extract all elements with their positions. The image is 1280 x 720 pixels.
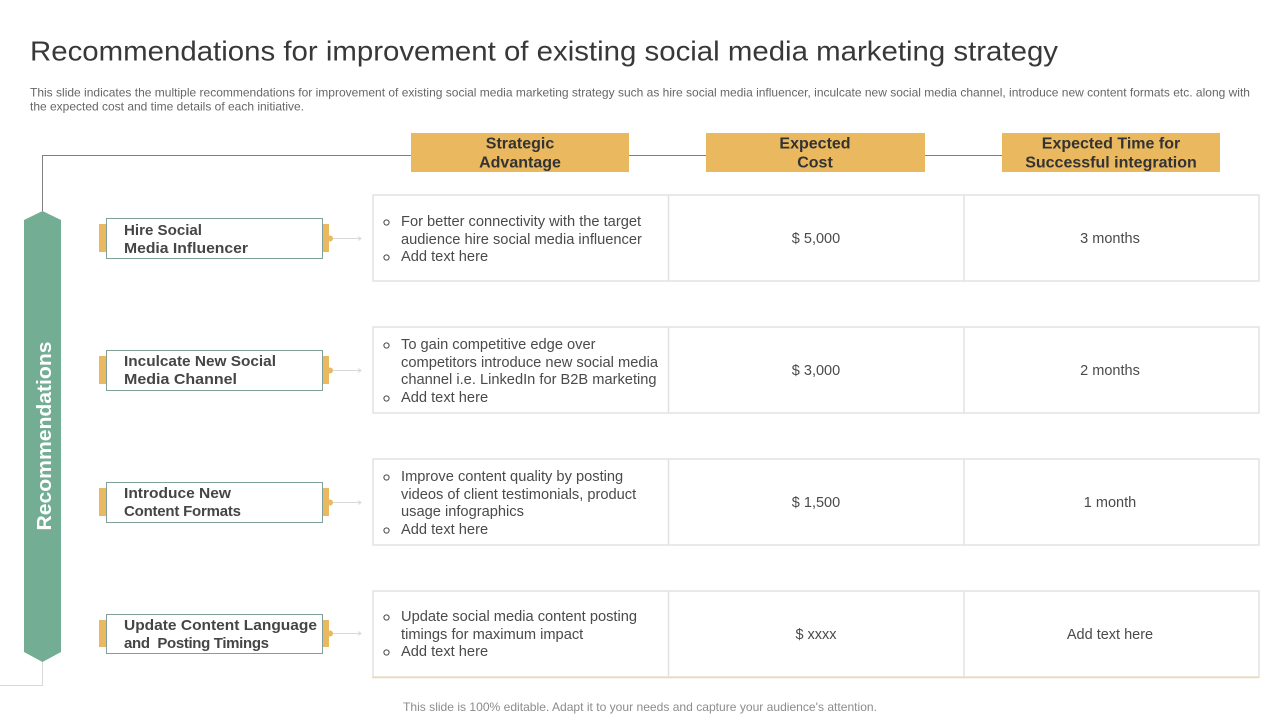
header: strategic advantage bbox=[411, 133, 629, 172]
description text: This slide indicates the multiple recommendations for improvement of existing social media marketing strategy such as hire social media influencer, inculcate new social media channel, introduce new content formats etc. along with bbox=[30, 86, 1250, 100]
table row 1: $ 5,000 bbox=[792, 231, 840, 247]
vertical banner: recommendations: Recommendations bbox=[34, 342, 56, 530]
table row 3: usage infographics bbox=[401, 504, 524, 520]
header: strategic advantage: Advantage bbox=[479, 154, 561, 172]
description text bbox=[30, 86, 1250, 114]
header: expected time: Successful integration bbox=[1025, 154, 1197, 172]
table row 2: $ 3,000 bbox=[792, 363, 840, 379]
table row 1: audience hire social media influencer bbox=[401, 232, 642, 248]
header: expected time bbox=[1002, 133, 1220, 172]
footer note: This slide is 100% editable. Adapt it to your needs and capture your audience's attention. bbox=[403, 700, 877, 714]
table row 3: 1 month bbox=[1084, 495, 1136, 511]
table row 4: Add text here bbox=[401, 644, 488, 660]
table row 3 bbox=[373, 459, 1259, 545]
header: expected cost: Cost bbox=[797, 154, 833, 172]
table row 2: To gain competitive edge over bbox=[401, 337, 596, 353]
table row 2: competitors introduce new social media bbox=[401, 355, 659, 371]
recommendation label: inculcate new social media channel: Inculcate New Social bbox=[124, 353, 276, 370]
table row 4: Update social media content posting bbox=[401, 609, 637, 625]
table row 2: Add text here bbox=[401, 390, 488, 406]
table row 4: $ xxxx bbox=[795, 627, 837, 643]
recommendation label: hire social media influencer: Hire Social bbox=[124, 222, 202, 239]
recommendation label: inculcate new social media channel bbox=[99, 350, 361, 390]
recommendation label: introduce new content formats bbox=[99, 482, 361, 522]
description text: the expected cost and time details of each initiative. bbox=[30, 100, 304, 114]
table row 1: 3 months bbox=[1080, 231, 1140, 247]
header: expected time: Expected Time for bbox=[1042, 136, 1180, 152]
recommendation label: update content language and posting timings: and Posting Timings bbox=[124, 635, 269, 652]
header: expected cost: Expected bbox=[779, 136, 851, 152]
title: Recommendations for improvement of existing social media marketing strategy bbox=[30, 36, 1058, 66]
table row 4: timings for maximum impact bbox=[401, 627, 583, 643]
recommendation label: introduce new content formats: Content Formats bbox=[124, 503, 241, 520]
table row 1: Add text here bbox=[401, 249, 488, 265]
table row 3: $ 1,500 bbox=[792, 495, 840, 511]
header: expected cost bbox=[706, 133, 925, 172]
recommendation label: hire social media influencer: Media Influencer bbox=[124, 240, 248, 257]
connector frame lines bbox=[0, 156, 1002, 686]
recommendation label: introduce new content formats: Introduce New bbox=[124, 485, 231, 502]
table row 1: For better connectivity with the target bbox=[401, 214, 641, 230]
table row 2 bbox=[373, 327, 1259, 413]
table row 3: videos of client testimonials, product bbox=[401, 487, 636, 503]
header: strategic advantage: Strategic bbox=[486, 136, 554, 152]
recommendation label: hire social media influencer bbox=[99, 218, 361, 258]
recommendation label: update content language and posting timings bbox=[99, 614, 361, 654]
vertical banner: recommendations bbox=[24, 211, 61, 662]
table row 2: channel i.e. LinkedIn for B2B marketing bbox=[401, 372, 657, 388]
recommendation label: inculcate new social media channel: Media Channel bbox=[124, 371, 237, 388]
table row 1 bbox=[373, 195, 1259, 281]
recommendation label: update content language and posting timings: Update Content Language bbox=[124, 617, 317, 634]
table row 4: Add text here bbox=[1067, 627, 1153, 643]
table row 2: 2 months bbox=[1080, 363, 1140, 379]
table row 3: Add text here bbox=[401, 522, 488, 538]
table row 3: Improve content quality by posting bbox=[401, 469, 623, 485]
table row 4 bbox=[372, 591, 1259, 678]
